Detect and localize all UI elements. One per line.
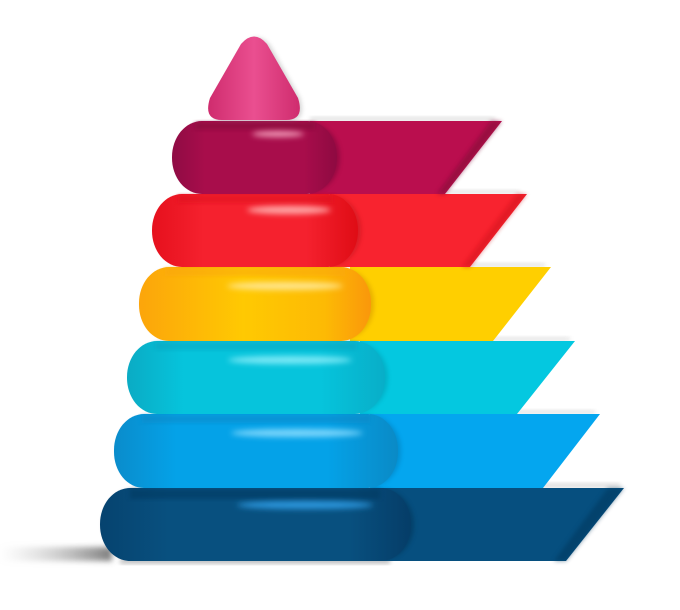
- band 4: cyan: [360, 337, 575, 414]
- ring 5: blue: [114, 414, 401, 488]
- band 1: crimson: [310, 117, 502, 194]
- ring 3: orange: [139, 267, 374, 341]
- band 6: navy: [380, 483, 624, 561]
- ring 6: navy: [100, 488, 414, 561]
- ring 1: crimson: [172, 121, 340, 194]
- band 3: yellow: [350, 263, 551, 341]
- ring 4: cyan: [127, 341, 388, 414]
- ring 2: red: [152, 194, 361, 267]
- ground shadow: [0, 547, 390, 564]
- band 5: blue: [370, 410, 600, 488]
- icon: cone top: [208, 36, 302, 121]
- band 2: red: [330, 190, 527, 267]
